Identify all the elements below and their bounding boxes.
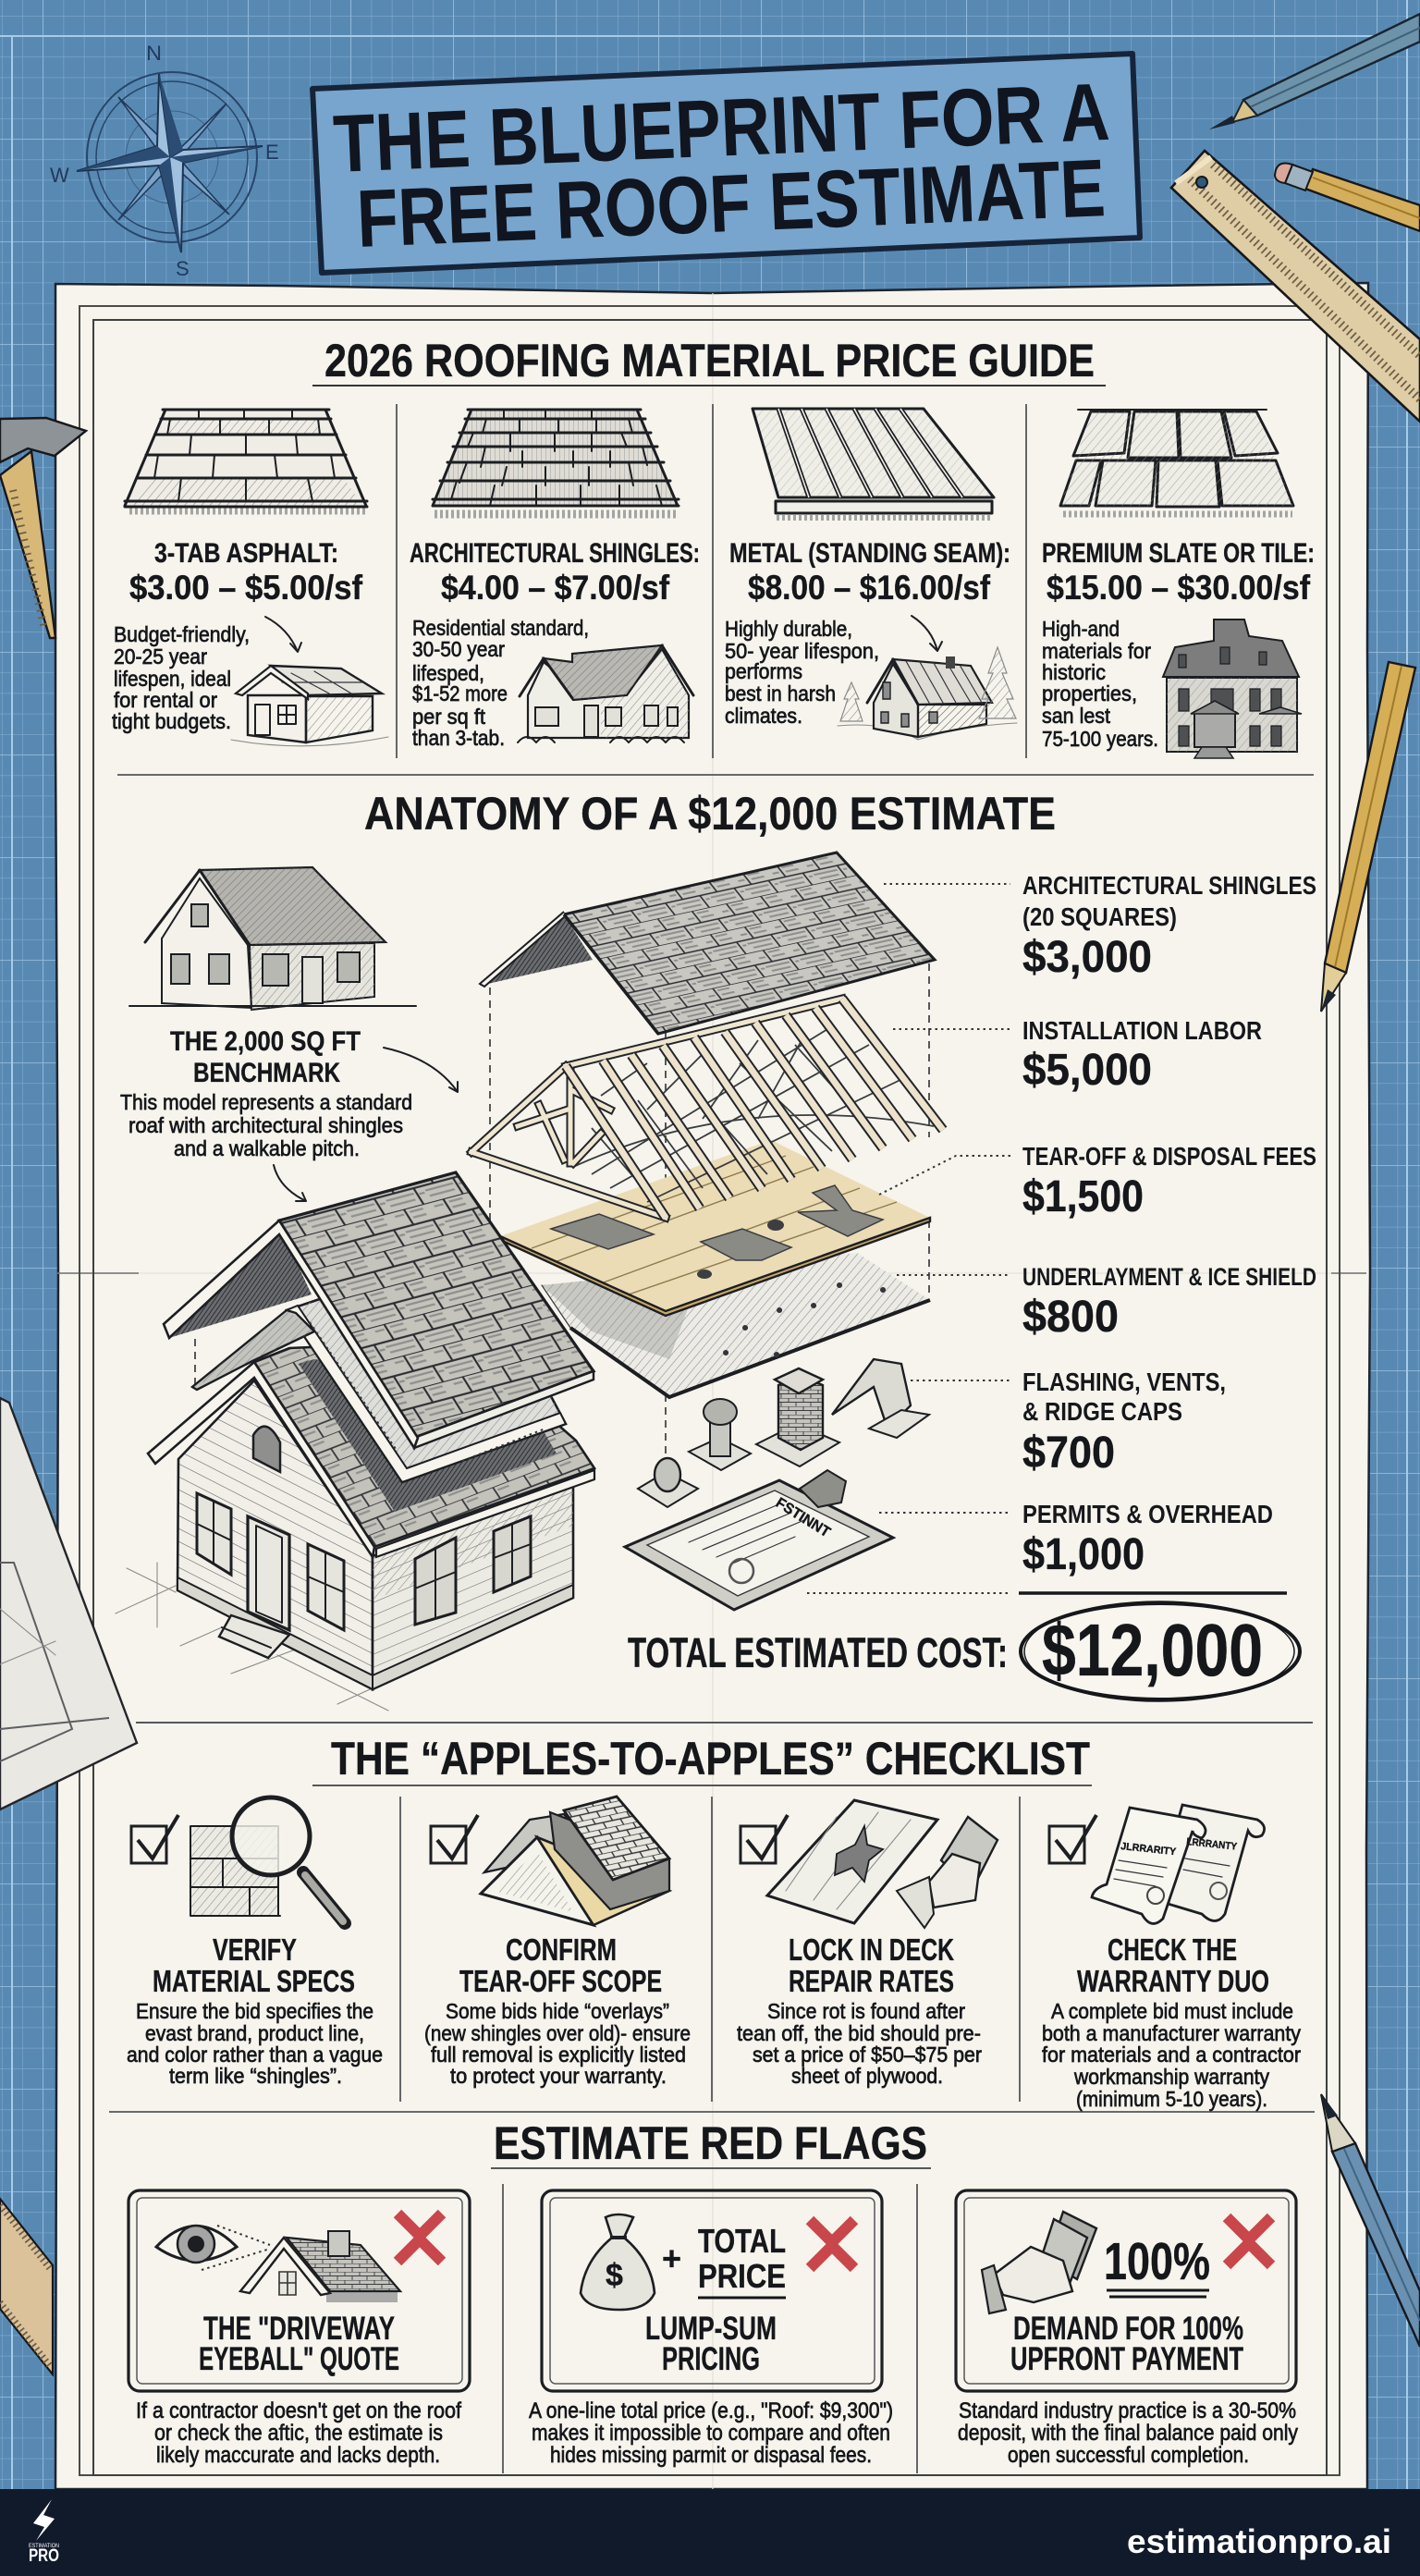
item: tear-off and disposal: TEAR-OFF & DISPOSAL FEES <box>1022 1142 1316 1171</box>
card: architectural shingles: $1-52 more <box>412 681 508 705</box>
title text: FREE ROOF ESTIMATE <box>355 141 1107 264</box>
card: confirm tear-off scope: (new shingles over old)- ensure <box>424 2021 691 2045</box>
icon: estimate clipboard <box>625 1470 893 1610</box>
item: underlayment: UNDERLAYMENT & ICE SHIELD <box>1022 1263 1316 1291</box>
card: 3-tab asphalt: Budget-friendly, <box>114 622 250 646</box>
card: lock in deck repair rates: REPAIR RATES <box>789 1964 954 1998</box>
card: metal standing seam: METAL (STANDING SEAM): <box>729 538 1010 569</box>
steps <box>219 1615 289 1658</box>
item: flashing <box>911 1368 1226 1478</box>
card: metal standing seam <box>725 538 1017 740</box>
card: demand for 100% upfront payment: UPFRONT PAYMENT <box>1010 2341 1243 2377</box>
item: installation labor: INSTALLATION LABOR <box>1022 1016 1262 1045</box>
heading: anatomy: ANATOMY OF A $12,000 ESTIMATE <box>364 788 1056 840</box>
window: left <box>197 1493 231 1575</box>
card: premium slate or tile <box>1042 538 1315 758</box>
card: check the warranty duo: CHECK THE <box>1108 1932 1237 1967</box>
underlayment layer <box>287 1257 566 1482</box>
icon: house <box>240 2231 400 2302</box>
card: driveway eyeball quote: If a contractor doesn't get on the roof <box>136 2398 461 2423</box>
arrow <box>265 617 301 652</box>
lower shingle plane <box>254 1341 594 1547</box>
icon: pipe vent <box>689 1399 751 1470</box>
cost labels <box>879 871 1316 1579</box>
card: check the warranty duo: workmanship warranty <box>1073 2065 1269 2089</box>
card: architectural shingles: than 3-tab. <box>412 726 505 750</box>
section: anatomy of an estimate <box>116 788 1316 1723</box>
icon: architectural shingle swatch <box>433 410 679 514</box>
fascia <box>376 1470 594 1557</box>
tool: hammer left <box>0 418 86 638</box>
card: confirm tear-off scope: CONFIRM <box>506 1932 617 1967</box>
wall: gable side <box>178 1380 373 1689</box>
icon: hand with cash <box>982 2212 1096 2313</box>
item: architectural shingles: $3,000 <box>1022 933 1152 982</box>
heading: red flags: ESTIMATE RED FLAGS <box>494 2117 927 2169</box>
compass rose: E <box>265 141 279 164</box>
item: tear-off and disposal: $1,500 <box>1022 1172 1144 1221</box>
card: premium slate or tile: PREMIUM SLATE OR TILE: <box>1042 538 1315 569</box>
card: premium slate or tile: san lest <box>1042 704 1111 728</box>
main exploded house <box>116 1172 594 1711</box>
card: architectural shingles: lifesped, <box>412 661 484 685</box>
item: installation labor: $5,000 <box>1022 1046 1152 1095</box>
tool: wooden ruler top right <box>1171 151 1420 422</box>
card: check the warranty duo: WARRANTY DUO <box>1077 1964 1269 1998</box>
heading: material price guide: 2026 ROOFING MATERIAL PRICE GUIDE <box>324 335 1095 386</box>
section: material price guide <box>112 335 1315 775</box>
card: 3-tab asphalt: 20-25 year <box>114 644 207 669</box>
icon: warranty scrolls: LRRRANTY <box>1186 1836 1238 1853</box>
item: flashing: FLASHING, VENTS, <box>1022 1368 1226 1396</box>
checkbox <box>131 1815 178 1863</box>
wall: long side <box>373 1484 573 1689</box>
footer logo: ESTIMATION <box>29 2544 59 2549</box>
icon: money bag <box>581 2214 655 2310</box>
card: check the warranty duo: for materials and a contractor <box>1042 2042 1301 2067</box>
card: check the warranty duo: A complete bid must include <box>1051 1999 1293 2023</box>
item: permits: PERMITS & OVERHEAD <box>1022 1500 1273 1528</box>
layer: shingles <box>480 853 935 1034</box>
card: metal standing seam: best in harsh <box>725 681 836 705</box>
icon: money bag: $ <box>606 2258 623 2293</box>
card: verify material specs: Ensure the bid specifies the <box>136 1999 373 2023</box>
icon: ridge flashing <box>832 1359 929 1438</box>
card: premium slate or tile: properties, <box>1042 681 1137 705</box>
card: metal standing seam: climates. <box>725 704 802 728</box>
icon: roof cross-section <box>481 1797 669 1925</box>
card: verify material specs: term like “shingles”. <box>169 2064 342 2088</box>
card: lump-sum pricing: makes it impossible to compare and often <box>532 2421 890 2446</box>
icon: small shed <box>231 666 388 746</box>
callout: 2,000 sq ft benchmark <box>120 1026 412 1160</box>
icon: warranty scrolls <box>1092 1805 1265 1923</box>
dashed guides <box>195 963 929 1479</box>
card: driveway eyeball quote <box>129 2190 470 2468</box>
card: verify material specs: MATERIAL SPECS <box>153 1964 355 1998</box>
card: lock in deck repair rates: Since rot is found after <box>767 1999 965 2023</box>
total label: TOTAL ESTIMATED COST: <box>628 1629 1008 1676</box>
card: premium slate or tile: historic <box>1042 660 1106 684</box>
callout: 2,000 sq ft benchmark: THE 2,000 SQ FT <box>170 1026 361 1057</box>
arrow: benchmark to layers <box>384 1048 458 1092</box>
card: metal standing seam: 50- year lifespon, <box>725 639 879 663</box>
callout: 2,000 sq ft benchmark: roaf with architectural shingles <box>129 1113 403 1137</box>
gable barge board <box>148 1362 374 1557</box>
footer website: estimationpro.ai <box>1127 2522 1391 2560</box>
icon: small house <box>518 645 693 742</box>
card: verify material specs: evast brand, product line, <box>145 2021 364 2045</box>
item: permits: $1,000 <box>1022 1530 1145 1579</box>
title text <box>332 66 1114 265</box>
tool: wooden ruler lower left <box>0 2199 53 2374</box>
tool: yellow pencil top right <box>1275 163 1420 231</box>
compass rose: S <box>176 257 190 280</box>
card: architectural shingles: $4.00 – $7.00/sf <box>441 569 670 607</box>
icon: red x <box>810 2220 854 2268</box>
plus sign: + <box>662 2239 681 2277</box>
exposed felt <box>299 1359 557 1512</box>
checkbox <box>431 1815 478 1863</box>
tool: yellow pencil right <box>1321 662 1415 1012</box>
card: demand for 100% upfront payment: 100% <box>1104 2232 1210 2291</box>
footer logo: PRO <box>29 2546 59 2566</box>
compass rose: N <box>146 42 162 65</box>
footer logo <box>29 2499 59 2566</box>
item: permits <box>879 1500 1273 1579</box>
item: underlayment: $800 <box>1022 1293 1119 1342</box>
item: architectural shingles: ARCHITECTURAL SHINGLES <box>1022 871 1316 900</box>
icon: standing seam metal swatch <box>753 409 994 518</box>
checkbox <box>1049 1815 1096 1863</box>
paper sheet <box>55 283 1370 2489</box>
icon: chimney flashing <box>756 1368 839 1466</box>
item: flashing: & RIDGE CAPS <box>1022 1397 1182 1426</box>
checkbox <box>741 1815 788 1863</box>
card: lump-sum pricing: LUMP-SUM <box>645 2311 777 2347</box>
card: metal standing seam: Highly durable, <box>725 617 852 641</box>
card: architectural shingles: 30-50 year <box>412 637 505 661</box>
card: confirm tear-off scope: Some bids hide “overlays” <box>446 1999 669 2023</box>
card: check the warranty duo: both a manufacturer warranty <box>1042 2021 1301 2045</box>
card: confirm tear-off scope: TEAR-OFF SCOPE <box>459 1964 662 1998</box>
card: demand for 100% upfront payment: open successful completion. <box>1008 2443 1249 2468</box>
card: 3-tab asphalt: 3-TAB ASPHALT: <box>154 538 338 569</box>
card: 3-tab asphalt: for rental or <box>114 688 217 712</box>
icon: red x <box>398 2214 442 2262</box>
top shingle layer <box>279 1172 594 1438</box>
card: verify material specs: and color rather than a vague <box>127 2042 383 2067</box>
icon: estimate clipboard: FSTINNT <box>773 1495 833 1540</box>
card: check the warranty duo <box>1042 1805 1301 2111</box>
card: confirm tear-off scope <box>424 1797 691 2088</box>
window: long side 1 <box>415 1538 456 1625</box>
arrow <box>912 616 942 651</box>
card: premium slate or tile: 75-100 years. <box>1042 727 1158 751</box>
compass rose <box>50 42 279 280</box>
card: premium slate or tile: materials for <box>1042 639 1151 663</box>
card: driveway eyeball quote: or check the aftic, the estimate is <box>154 2421 443 2446</box>
icon: small house with metal roof <box>838 647 1017 740</box>
total callout: $12,000 <box>1042 1609 1263 1691</box>
card: check the warranty duo: (minimum 5-10 years). <box>1076 2087 1267 2111</box>
section: estimate red flags <box>129 2117 1298 2473</box>
icon: rotted plywood and cash <box>767 1800 998 1928</box>
callout: 2,000 sq ft benchmark: and a walkable pitch. <box>174 1136 360 1160</box>
arrow: benchmark to house <box>274 1165 306 1201</box>
card: lock in deck repair rates <box>737 1800 998 2088</box>
ground sketch lines <box>116 1563 388 1711</box>
icon: half-round vent <box>638 1458 698 1507</box>
compass rose: W <box>50 164 69 187</box>
card: lock in deck repair rates: set a price of $50–$75 per <box>753 2042 982 2067</box>
card: premium slate or tile: High-and <box>1042 617 1120 641</box>
card: driveway eyeball quote: EYEBALL" QUOTE <box>199 2341 399 2377</box>
card: 3-tab asphalt: $3.00 – $5.00/sf <box>129 569 363 607</box>
card: metal standing seam: performs <box>725 659 802 683</box>
icon: red x <box>1227 2217 1271 2265</box>
card: premium slate or tile: $15.00 – $30.00/sf <box>1047 569 1311 607</box>
item: tear-off and disposal <box>879 1142 1316 1221</box>
card: lump-sum pricing: PRICING <box>662 2341 760 2377</box>
icon: warranty scrolls: JLRRARITY <box>1120 1841 1177 1858</box>
card: lump-sum pricing <box>529 2190 893 2468</box>
door <box>248 1516 289 1630</box>
item: architectural shingles <box>884 871 1316 982</box>
card: architectural shingles: Residential standard, <box>412 616 589 640</box>
card: confirm tear-off scope: to protect your warranty. <box>450 2064 667 2088</box>
card: architectural shingles <box>410 538 700 750</box>
item: underlayment <box>897 1263 1316 1342</box>
title stamp <box>312 54 1140 273</box>
callout: 2,000 sq ft benchmark: This model represents a standard <box>120 1090 412 1114</box>
card: lump-sum pricing: A one-line total price (e.g., "Roof: $9,300") <box>529 2398 893 2423</box>
layer: roof deck <box>500 1140 930 1316</box>
item: flashing: $700 <box>1022 1429 1115 1478</box>
title text: THE BLUEPRINT FOR A <box>332 66 1111 190</box>
card: driveway eyeball quote: likely maccurate and lacks depth. <box>156 2443 440 2468</box>
card: 3-tab asphalt: tight budgets. <box>112 709 231 733</box>
section: apples-to-apples checklist <box>109 1733 1315 2112</box>
card: lock in deck repair rates: LOCK IN DECK <box>789 1932 954 1967</box>
loose blueprint sheet <box>0 1398 137 1809</box>
item: architectural shingles: (20 SQUARES) <box>1022 902 1177 931</box>
card: demand for 100% upfront payment: Standard industry practice is a 30-50% <box>959 2398 1296 2423</box>
icon: 3-tab shingle swatch <box>125 410 367 511</box>
window: right of door <box>308 1544 344 1630</box>
icon: eye <box>156 2226 270 2270</box>
item: installation labor <box>893 1016 1262 1095</box>
icon: bricks and magnifier <box>190 1797 345 1923</box>
card: architectural shingles: ARCHITECTURAL SHINGLES: <box>410 538 700 569</box>
icon: victorian mansion <box>1163 619 1302 758</box>
window: long side 2 <box>494 1516 531 1592</box>
card: 3-tab asphalt <box>112 538 388 746</box>
card: verify material specs <box>127 1797 383 2088</box>
card: verify material specs: VERIFY <box>213 1932 297 1967</box>
footer bar <box>0 2489 1420 2576</box>
window: arched attic <box>253 1427 280 1472</box>
card: demand for 100% upfront payment <box>956 2190 1298 2468</box>
layer: trusses <box>471 999 943 1218</box>
tool: blue pencil top right <box>1209 14 1420 129</box>
card: lump-sum pricing: hides missing parmit or dispasal fees. <box>550 2443 872 2468</box>
card: demand for 100% upfront payment: deposit, with the final balance paid only <box>958 2421 1298 2446</box>
card: demand for 100% upfront payment: DEMAND FOR 100% <box>1013 2311 1243 2347</box>
tool: blue pencil lower right <box>1321 2094 1420 2347</box>
icon: benchmark house <box>129 867 416 1010</box>
card: driveway eyeball quote: THE "DRIVEWAY <box>203 2311 395 2347</box>
card: lock in deck repair rates: tean off, the bid should pre- <box>737 2021 981 2045</box>
callout: 2,000 sq ft benchmark: BENCHMARK <box>193 1058 340 1088</box>
card: metal standing seam: $8.00 – $16.00/sf <box>748 569 991 607</box>
layer: underlayment <box>542 1253 930 1397</box>
heading: checklist: THE “APPLES-TO-APPLES” CHECKLIST <box>331 1733 1090 1785</box>
icon: slate tile swatch <box>1060 410 1293 514</box>
card: architectural shingles: per sq ft <box>412 705 486 729</box>
card: 3-tab asphalt: lifespen, ideal <box>114 667 231 691</box>
card: lump-sum pricing: PRICE <box>698 2257 786 2295</box>
card: lock in deck repair rates: sheet of plywood. <box>791 2064 943 2088</box>
card: lump-sum pricing: TOTAL <box>698 2222 786 2260</box>
card: confirm tear-off scope: full removal is explicitly listed <box>431 2042 686 2067</box>
